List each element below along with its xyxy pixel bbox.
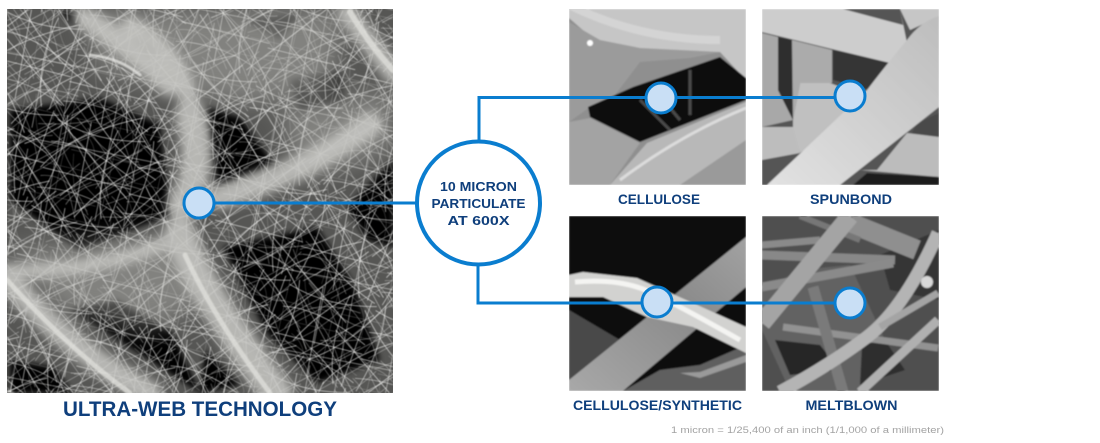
heading: ultra-web technology: ULTRA-WEB TECHNOLOGY [63,398,337,421]
callout: 10 micron particulate at 600x: 10 MICRON [440,180,517,194]
connector: top branch to cellulose and spunbond [479,98,845,140]
label: cellulose: CELLULOSE [618,191,700,207]
panel: ultra-web technology micrograph [5,9,393,393]
callout: 10 micron particulate at 600x [417,142,540,264]
label: meltblown: MELTBLOWN [806,397,898,413]
marker: ultra-web particle [184,188,214,218]
panel: spunbond micrograph [762,9,939,185]
footnote: micron definition: 1 micron = 1/25,400 of an inch (1/1,000 of a millimeter) [671,425,944,436]
panel: cellulose micrograph [569,5,746,185]
marker: cellulose/synthetic particle [642,287,672,317]
label: cellulose/synthetic: CELLULOSE/SYNTHETIC [573,397,742,413]
panel: cellulose/synthetic micrograph [569,216,746,391]
callout: 10 micron particulate at 600x: AT 600X [448,214,510,228]
label: spunbond: SPUNBOND [810,191,892,207]
panel: meltblown micrograph [762,216,939,392]
marker: meltblown particle [835,288,865,318]
marker: cellulose particle [646,83,676,113]
marker: spunbond particle [835,81,865,111]
connector: ultra-web to particulate circle [214,202,417,204]
callout: 10 micron particulate at 600x: PARTICULATE [432,197,526,211]
connector: bottom branch to cellulose/synthetic and meltblown [478,266,845,303]
